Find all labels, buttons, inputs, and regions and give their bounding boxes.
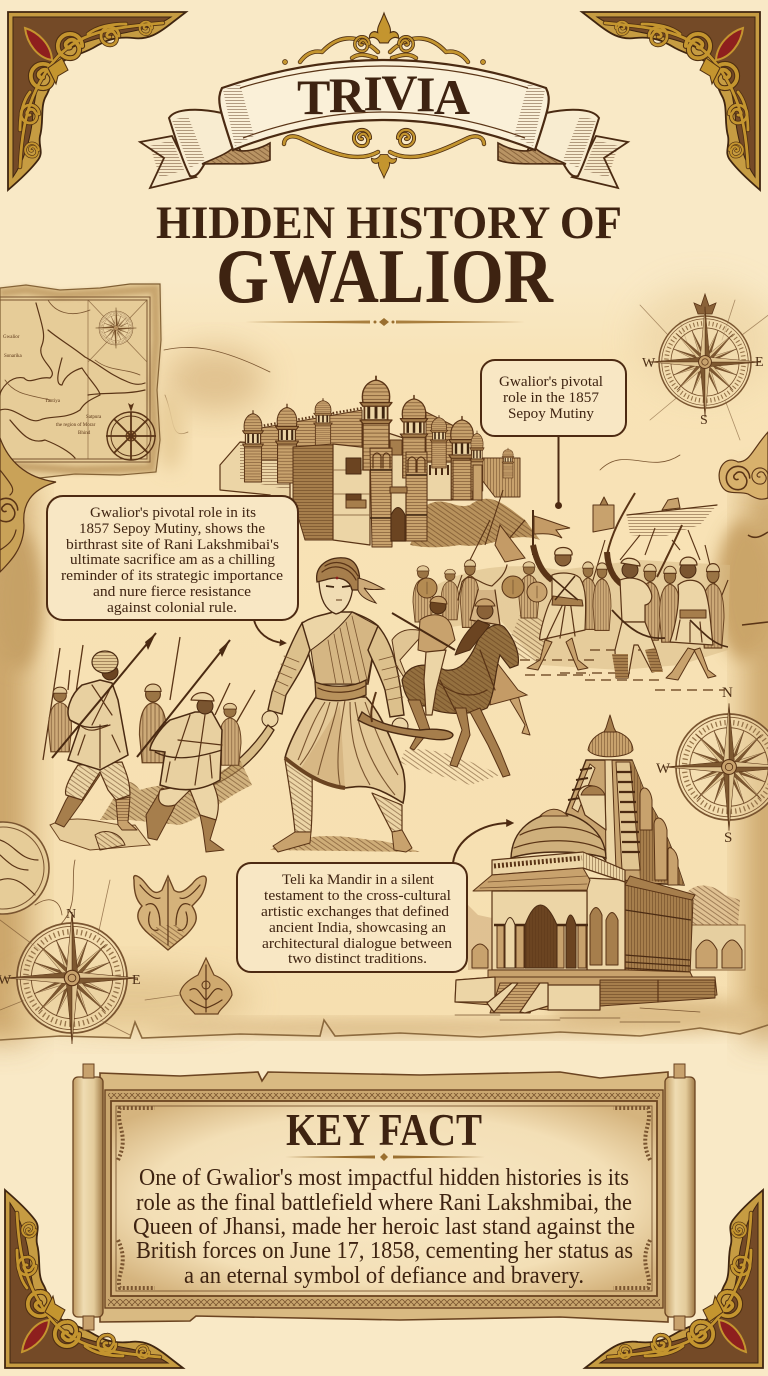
head bbox=[319, 575, 353, 614]
corner ornament: top right bbox=[582, 12, 760, 190]
war flag left bbox=[495, 525, 525, 562]
scroll paper bbox=[100, 1072, 668, 1322]
front block bbox=[293, 444, 333, 540]
base platform bbox=[455, 977, 717, 1010]
upper curtain wall bbox=[250, 410, 362, 460]
temple stairs bbox=[490, 983, 545, 1013]
ribbon banner with title word bbox=[140, 13, 628, 188]
ornament: left gold scroll bbox=[0, 438, 56, 572]
arrow to temple bbox=[453, 823, 511, 863]
scabbard in hand bbox=[358, 712, 453, 740]
key fact body text: One of Gwalior's most impactful hidden histories is its bbox=[139, 1165, 629, 1191]
main heading bbox=[156, 197, 622, 319]
callout: Teli ka Mandir note: Teli ka Mandir in a silent bbox=[282, 872, 435, 888]
callout: long Sepoy Mutiny note: Gwalior's pivotal role in its bbox=[90, 505, 256, 521]
sepoy with spear bbox=[52, 633, 156, 830]
illustration: Rani Lakshmibai bbox=[183, 558, 453, 852]
waist sash bbox=[315, 680, 366, 701]
ornament: small floral bbox=[180, 958, 232, 1014]
background arcades and trees bbox=[468, 886, 745, 970]
sepoy with sabre bbox=[137, 640, 230, 852]
heading divider bbox=[245, 318, 525, 326]
figure with raised arms bbox=[470, 590, 500, 625]
callout: 1857 Sepoy Mutiny short note: Gwalior's pivotal bbox=[499, 374, 603, 390]
illustration: soldier with raised sabre bbox=[607, 493, 665, 678]
round shields bbox=[417, 578, 437, 598]
courtyard lines bbox=[455, 1008, 700, 1022]
callout: long Sepoy Mutiny note: against colonial rule. bbox=[107, 600, 237, 616]
heading line one: HIDDEN HISTORY OF bbox=[156, 197, 622, 249]
map labels: Tantiya bbox=[45, 399, 61, 404]
compass rose: bottom left: N bbox=[66, 907, 76, 922]
compass rose: middle right: N bbox=[722, 685, 733, 701]
callout: 1857 Sepoy Mutiny short note bbox=[481, 360, 626, 436]
banner word TRIVIA: TRIVIA bbox=[297, 64, 470, 125]
left scroll roller bbox=[73, 1064, 103, 1330]
key fact heading: KEY FACT bbox=[286, 1104, 482, 1155]
lower left wall bbox=[220, 442, 290, 510]
illustration: soldier with long coat bbox=[657, 525, 728, 680]
ribbon main band bbox=[219, 60, 549, 150]
inner frame bbox=[105, 1090, 663, 1308]
rocky ground bbox=[50, 819, 150, 850]
panel: key fact scroll bbox=[73, 1064, 695, 1330]
compass rose: middle right: S bbox=[724, 830, 732, 846]
ornament: shield emblem bbox=[134, 876, 206, 950]
illustration: sepoys on the left bbox=[43, 633, 255, 852]
illustration: Teli ka Mandir temple bbox=[455, 715, 745, 1022]
callout pointer to soldiers bbox=[555, 436, 562, 509]
hill under fort bbox=[410, 499, 540, 547]
compass rose: top right: E bbox=[755, 355, 764, 370]
corner ornament: top left bbox=[8, 12, 186, 190]
right scroll roller bbox=[665, 1064, 695, 1330]
porch bbox=[492, 891, 587, 970]
parapet bbox=[492, 852, 625, 882]
callout: 1857 Sepoy Mutiny short note: Sepoy Mutiny bbox=[508, 406, 594, 422]
shikhara tower bbox=[565, 760, 684, 885]
plinth bbox=[488, 970, 693, 978]
illustration: Gwalior fort bbox=[220, 376, 540, 547]
callout: Teli ka Mandir note: ancient India, showcasing an bbox=[269, 920, 447, 936]
main tower left bbox=[360, 376, 392, 470]
horse rear far legs bbox=[510, 695, 530, 735]
map labels: Satpura bbox=[86, 415, 102, 420]
dhoti bbox=[285, 697, 405, 803]
callout: 1857 Sepoy Mutiny short note: role in the 1857 bbox=[503, 390, 599, 406]
key fact body text: a an eternal symbol of defiance and bravery. bbox=[184, 1263, 584, 1289]
dust and road bbox=[520, 650, 725, 690]
callout: long Sepoy Mutiny note: reminder of its strategic importance bbox=[61, 568, 283, 584]
callout: long Sepoy Mutiny note: and nure fierce resistance bbox=[93, 584, 251, 600]
rear spears bbox=[43, 637, 255, 760]
compass rose: top right: W bbox=[642, 356, 656, 371]
map labels bbox=[3, 335, 102, 436]
right hall bbox=[625, 880, 693, 975]
corner ornament: bottom left bbox=[5, 1190, 183, 1368]
callout: long Sepoy Mutiny note: birthrast site of Rani Lakshmibai's bbox=[66, 537, 279, 553]
horse cape and tail bbox=[392, 630, 425, 690]
main tower right bbox=[400, 396, 428, 478]
fort towers bbox=[243, 411, 263, 482]
ribbon left fold bbox=[140, 110, 270, 188]
illustration: horse and riders bbox=[392, 596, 530, 785]
illustration: soldier with flag bbox=[527, 510, 588, 670]
callout: Teli ka Mandir note: architectural dialogue between bbox=[262, 936, 453, 952]
compass rose: top right bbox=[640, 294, 768, 440]
crest ornament above ribbon bbox=[282, 13, 486, 64]
dome bbox=[511, 812, 606, 858]
fort gate bbox=[391, 490, 406, 541]
key fact body text: role as the final battlefield where Rani Lakshmibai, the bbox=[136, 1190, 632, 1216]
old map bbox=[0, 284, 184, 478]
callout: long Sepoy Mutiny note bbox=[47, 496, 298, 620]
arms bbox=[268, 623, 310, 714]
callout: long Sepoy Mutiny note: ultimate sacrifice am as a chilling bbox=[70, 552, 275, 568]
left globe map fragment bbox=[0, 822, 75, 925]
eave bbox=[473, 868, 590, 891]
compass rose: bottom left bbox=[0, 880, 180, 1044]
ribbon right fold bbox=[498, 110, 628, 188]
map wheel bbox=[106, 403, 156, 460]
far right wall bbox=[482, 458, 520, 497]
torso and sari bbox=[302, 612, 378, 684]
callout: long Sepoy Mutiny note: 1857 Sepoy Mutiny, shows the bbox=[79, 521, 265, 537]
compass rose: top right: S bbox=[700, 413, 708, 428]
hands bbox=[262, 711, 278, 727]
amalaka and finial bbox=[588, 730, 633, 757]
key fact divider bbox=[285, 1153, 485, 1161]
map rose bbox=[96, 308, 136, 348]
callout: Teli ka Mandir note: two distinct traditions. bbox=[288, 951, 427, 967]
callout: Teli ka Mandir note bbox=[237, 863, 467, 972]
map labels: Bhind bbox=[78, 431, 91, 436]
lead rider bbox=[418, 615, 455, 655]
compass rose: middle right: W bbox=[656, 761, 671, 777]
background sepoys bbox=[48, 687, 72, 752]
key fact body text: Queen of Jhansi, made her heroic last stand against the bbox=[133, 1214, 635, 1240]
arrow to Rani Lakshmibai bbox=[254, 620, 284, 643]
ground shadow bbox=[270, 836, 420, 852]
map labels: Gwalior bbox=[3, 335, 20, 340]
key fact body text: British forces on June 17, 1858, cementing her status as bbox=[136, 1238, 633, 1264]
legs and feet bbox=[285, 760, 312, 832]
illustration: background soldiers right bbox=[413, 490, 730, 690]
ornament under ribbon bbox=[284, 130, 484, 178]
horse legs bbox=[450, 708, 470, 767]
second rider bbox=[477, 603, 493, 619]
horse body bbox=[402, 625, 518, 713]
compass rose: middle right bbox=[656, 685, 768, 846]
compass rose: bottom left: E bbox=[132, 973, 141, 988]
key fact body text bbox=[133, 1165, 635, 1289]
sword bbox=[183, 725, 274, 792]
heading line two: GWALIOR bbox=[216, 233, 554, 319]
callout: Teli ka Mandir note: testament to the cross-cultural bbox=[264, 888, 451, 904]
map labels: Sonarika bbox=[4, 354, 23, 359]
illustration: distant fort wall right bbox=[593, 497, 717, 538]
panel: parchment illustration sheet bbox=[0, 280, 768, 1040]
ornament: right scroll bbox=[719, 432, 768, 625]
map labels: the region of Morar bbox=[56, 423, 96, 428]
ground shading under horse bbox=[400, 749, 500, 785]
callout: Teli ka Mandir note: artistic exchanges that defined bbox=[261, 904, 450, 920]
corner ornament: bottom right bbox=[585, 1190, 763, 1368]
